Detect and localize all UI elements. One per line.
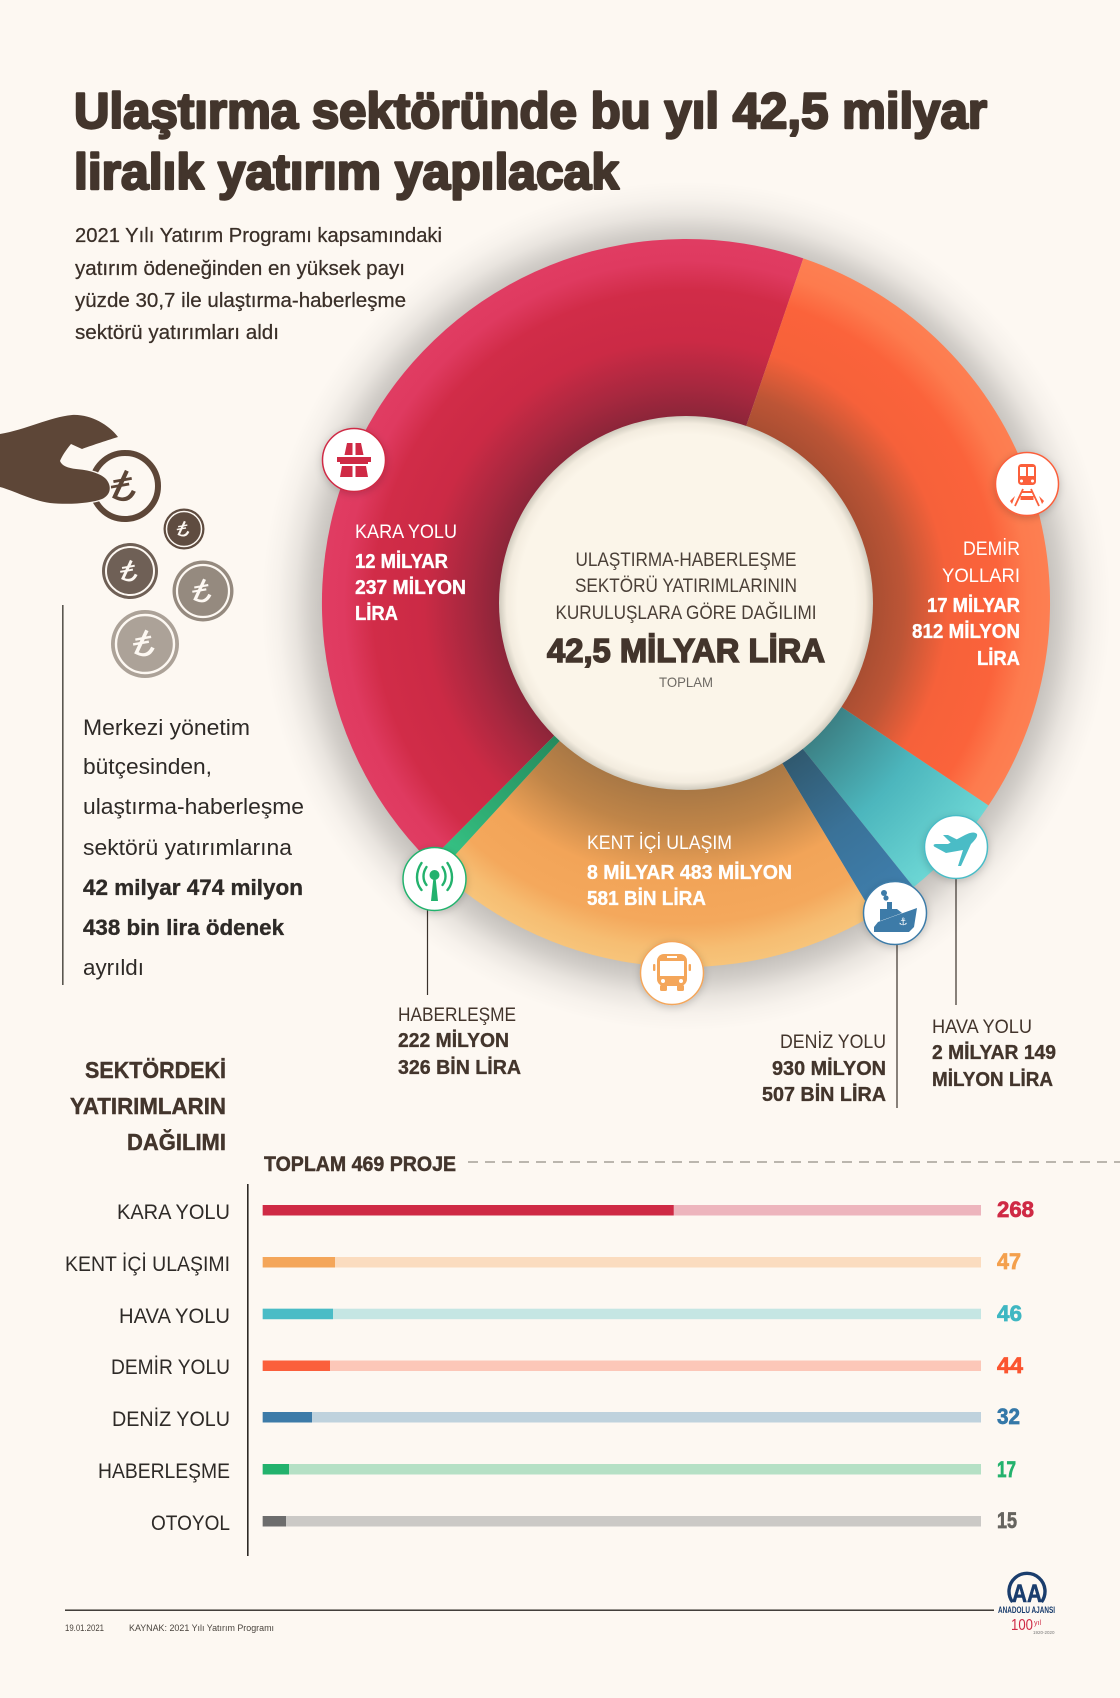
segment: haberleşme <box>430 603 686 871</box>
left callout: budget text: ayrıldı <box>83 955 144 980</box>
label: kara yolu: LİRA <box>355 602 398 625</box>
label: haberleşme: 326 BİN LİRA <box>398 1056 521 1079</box>
label: kent içi ulaşım: 581 BİN LİRA <box>587 887 706 910</box>
label: deniz yolu: DENİZ YOLU <box>780 1032 886 1053</box>
label: kent içi ulaşım: 8 MİLYAR 483 MİLYON <box>587 861 792 884</box>
segment: hava yolu <box>686 603 988 887</box>
logo: anadolu ajansi <box>998 1573 1055 1635</box>
row: hava yolu: HAVA YOLU <box>119 1304 230 1328</box>
logo: anadolu ajansi: yıl <box>1034 1620 1041 1627</box>
label: deniz yolu: 507 BİN LİRA <box>762 1083 886 1106</box>
leader line: deniz yolu <box>896 940 898 1108</box>
label: demir yolları: YOLLARI <box>942 566 1020 587</box>
center text <box>547 550 825 690</box>
intro text: 2021 Yılı Yatırım Programı kapsamındaki <box>75 224 442 247</box>
intro text <box>75 224 442 344</box>
icon: small coin 2: ₺ <box>114 553 145 591</box>
row: deniz yolu <box>112 1404 1020 1431</box>
title: Ulaştırma sektöründe bu yıl 42,5 milyar <box>74 83 987 139</box>
row: kara yolu: 268 <box>997 1197 1034 1222</box>
icon: small coin 1 <box>164 508 204 550</box>
row: haberleşme <box>98 1457 1016 1483</box>
label: haberleşme: 222 MİLYON <box>398 1029 509 1052</box>
logo: anadolu ajansi: 1920-2020 <box>1033 1630 1055 1635</box>
left callout: budget text: Merkezi yönetim <box>83 715 250 740</box>
row: demir yolu: DEMİR YOLU <box>111 1355 230 1379</box>
left callout: budget text: bütçesinden, <box>83 754 212 779</box>
segment: deniz yolu <box>686 603 914 915</box>
left callout: budget text: 438 bin lira ödenek <box>83 915 285 940</box>
footer: KAYNAK: 2021 Yılı Yatırım Programı <box>129 1623 274 1634</box>
icon: small coin 4: ₺ <box>125 622 163 669</box>
icon: small coin 3 <box>172 560 234 622</box>
label: hava yolu <box>932 1017 1056 1091</box>
row: deniz yolu: 32 <box>997 1404 1020 1429</box>
icon: antenna <box>403 848 466 910</box>
title <box>74 83 987 200</box>
intro text: yüzde 30,7 ile ulaştırma-haberleşme <box>75 289 406 312</box>
segment: demir yolları <box>686 258 1050 805</box>
section heading: sector distribution <box>70 1057 226 1155</box>
label: hava yolu: HAVA YOLU <box>932 1017 1032 1038</box>
row: haberleşme: 17 <box>997 1457 1016 1482</box>
icon: small coin 2 <box>102 543 158 599</box>
label: demir yolları: 812 MİLYON <box>912 620 1020 643</box>
icon: highway <box>322 428 386 492</box>
center text: ULAŞTIRMA-HABERLEŞME <box>576 550 796 571</box>
donut shadow <box>261 181 1111 1031</box>
logo: anadolu ajansi: 100 <box>1011 1617 1033 1634</box>
icon: large coin <box>92 453 158 519</box>
center text: 42,5 MİLYAR LİRA <box>547 632 825 669</box>
left callout: budget text: ulaştırma-haberleşme <box>83 794 304 819</box>
leader line: hava yolu <box>955 875 957 1005</box>
label: deniz yolu <box>762 1032 886 1106</box>
row: otoyol: 15 <box>997 1508 1017 1533</box>
label: kara yolu: KARA YOLU <box>355 522 457 543</box>
segment: kent içi ulaşım <box>440 603 874 967</box>
row: kara yolu <box>117 1197 1034 1224</box>
icon: plane <box>924 816 988 878</box>
label: kara yolu <box>355 522 466 625</box>
row: demir yolu: 44 <box>997 1353 1024 1378</box>
label: hava yolu: MİLYON LİRA <box>932 1068 1053 1091</box>
logo: anadolu ajansi: AA <box>1012 1580 1042 1608</box>
icon: bus <box>640 942 704 1004</box>
label: haberleşme: HABERLEŞME <box>398 1005 516 1026</box>
label: kent içi ulaşım <box>587 833 792 910</box>
row: otoyol: OTOYOL <box>151 1511 230 1535</box>
row: hava yolu <box>119 1301 1022 1328</box>
section heading: sector distribution: DAĞILIMI <box>127 1128 226 1155</box>
label: hava yolu: 2 MİLYAR 149 <box>932 1041 1056 1064</box>
label: demir yolları <box>912 539 1021 670</box>
icon: hand dropping coins <box>0 415 234 678</box>
center text: SEKTÖRÜ YATIRIMLARININ <box>575 576 797 597</box>
icon: large coin: ₺ <box>102 460 147 515</box>
row: hava yolu: 46 <box>997 1301 1022 1326</box>
icon: ship <box>864 882 926 944</box>
label: kara yolu: 12 MİLYAR <box>355 550 449 573</box>
row: deniz yolu: DENİZ YOLU <box>112 1407 230 1431</box>
row: kara yolu: KARA YOLU <box>117 1200 230 1224</box>
segment: kara yolu <box>322 239 803 861</box>
intro text: sektörü yatırımları aldı <box>75 321 279 344</box>
row: kent içi ulaşımı: 47 <box>997 1249 1021 1274</box>
icon: small coin 4 <box>111 610 179 678</box>
left callout: budget text: sektörü yatırımlarına <box>83 835 293 860</box>
label: demir yolları: DEMİR <box>963 539 1020 560</box>
icon: hand <box>0 415 118 504</box>
label: demir yolları: 17 MİLYAR <box>927 594 1021 617</box>
bar chart: projects by sector <box>65 1184 1034 1556</box>
icon: train <box>996 452 1058 516</box>
icon: small coin 1: ₺ <box>172 516 195 544</box>
label: demir yolları: LİRA <box>977 647 1020 670</box>
icon: small coin 3: ₺ <box>185 570 220 613</box>
intro text: yatırım ödeneğinden en yüksek payı <box>75 257 405 280</box>
footer: 19.01.2021 <box>65 1623 104 1634</box>
label: haberleşme <box>398 1005 521 1079</box>
donut chart <box>322 239 1050 967</box>
row: haberleşme: HABERLEŞME <box>98 1459 230 1483</box>
row: kent içi ulaşımı <box>65 1249 1021 1276</box>
title: liralık yatırım yapılacak <box>74 144 619 200</box>
center text: KURULUŞLARA GÖRE DAĞILIMI <box>556 602 816 624</box>
leader line: haberleşme <box>426 905 428 995</box>
section heading: sector distribution: YATIRIMLARIN <box>70 1093 226 1119</box>
label: kara yolu: 237 MİLYON <box>355 576 466 599</box>
left callout: budget text <box>62 605 304 985</box>
center text: TOPLAM <box>659 674 713 690</box>
total projects heading: TOPLAM 469 PROJE <box>264 1153 456 1176</box>
row: demir yolu <box>111 1353 1024 1379</box>
left callout: budget text: 42 milyar 474 milyon <box>83 875 303 900</box>
logo: anadolu ajansi: ANADOLU AJANSI <box>998 1605 1055 1615</box>
label: kent içi ulaşım: KENT İÇİ ULAŞIM <box>587 833 732 854</box>
label: deniz yolu: 930 MİLYON <box>772 1057 886 1080</box>
donut center <box>499 416 873 790</box>
row: otoyol <box>151 1508 1017 1535</box>
row: kent içi ulaşımı: KENT İÇİ ULAŞIMI <box>65 1252 230 1276</box>
icon: ship: ⚓ <box>899 917 908 928</box>
footer <box>65 1610 994 1634</box>
section heading: sector distribution: SEKTÖRDEKİ <box>85 1057 226 1083</box>
